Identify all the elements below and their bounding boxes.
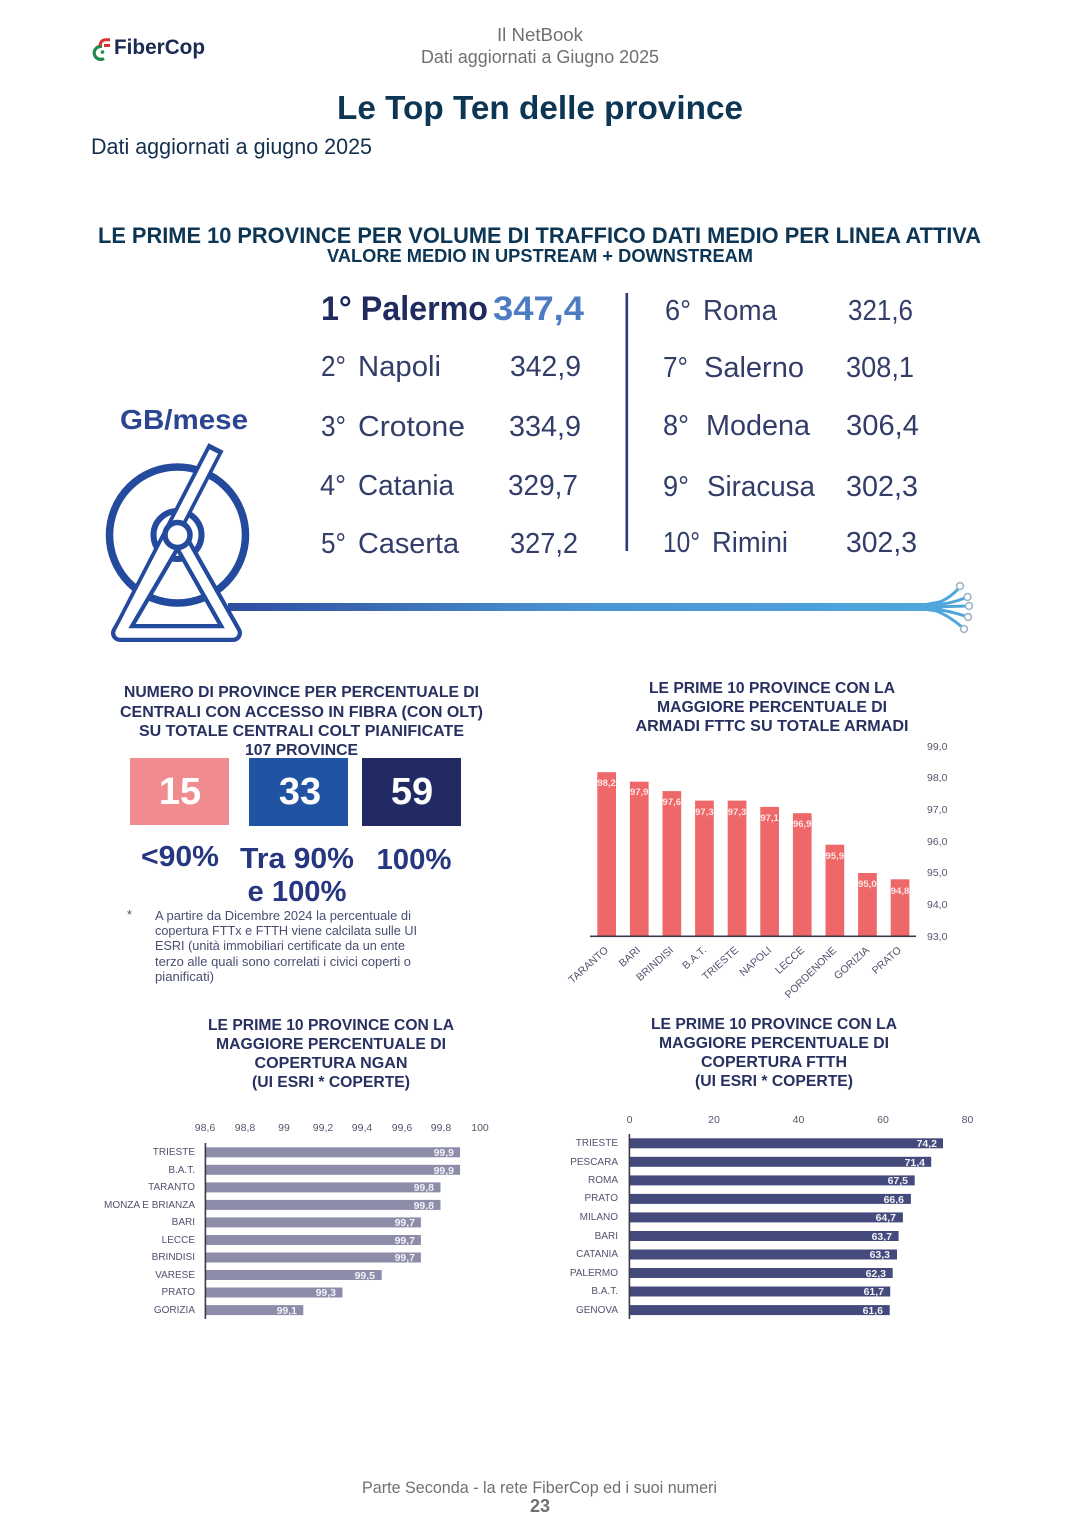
panel: NGAN coverage chart (104, 1017, 489, 1319)
footnote: terzo alle quali sono correlati i civici coperti o (155, 955, 411, 969)
tile 33: 33 (279, 771, 321, 813)
header text: Dati aggiornati a Giugno 2025 (421, 47, 659, 67)
x axis: 60 (877, 1114, 889, 1126)
footer: Parte Seconda - la rete FiberCop ed i suoi numeri (362, 1478, 717, 1497)
ranks 2 to 5: 3° (321, 411, 346, 443)
ranks 6 to 10: Modena (706, 410, 811, 442)
province labels: PESCARA (570, 1157, 618, 1168)
bar values: 97,3 (695, 807, 714, 818)
heading: COPERTURA FTTH (701, 1054, 847, 1071)
province labels: PALERMO (570, 1268, 618, 1279)
bar values (277, 1147, 454, 1317)
x axis: 98,6 (195, 1122, 215, 1134)
footnote (127, 908, 417, 984)
ranks 6 to 10: 321,6 (848, 295, 913, 327)
footnote: A partire da Dicembre 2024 la percentuale di (155, 909, 411, 923)
ranks 6 to 10: Rimini (712, 527, 788, 559)
province labels: LECCE (162, 1235, 195, 1246)
x axis: 99,6 (392, 1122, 412, 1134)
ranks 6 to 10: Roma (703, 295, 778, 327)
y axis: 99,0 (927, 741, 948, 753)
ranks 6 to 10: Salerno (704, 352, 804, 384)
bar values: 62,3 (866, 1268, 886, 1280)
tile labels: Tra 90% (240, 843, 354, 875)
x axis: 0 (627, 1114, 633, 1126)
icon: fibre cable line and fan-out (228, 583, 972, 632)
ranks 2 to 5: 2° (321, 351, 346, 383)
x labels: TARANTO (566, 944, 611, 986)
bar values (863, 1138, 937, 1317)
ranks 6 to 10: 7° (663, 352, 688, 384)
heading: LE PRIME 10 PROVINCE CON LA (208, 1017, 454, 1034)
panel: FTTH coverage chart (570, 1016, 973, 1319)
heading: SU TOTALE CENTRALI COLT PIANIFICATE (139, 723, 464, 740)
bar values: 99,9 (434, 1165, 454, 1177)
bar values: 95,9 (826, 851, 844, 862)
bar values: 63,7 (872, 1231, 892, 1243)
bars (597, 772, 909, 936)
subtitle: Dati aggiornati a giugno 2025 (91, 134, 372, 159)
ranks 6 to 10: 8° (663, 410, 689, 442)
ranks 2 to 5: Crotone (358, 411, 465, 443)
ranks 2 to 5: 4° (320, 470, 346, 502)
tile 33 (249, 758, 348, 826)
rank 1 Palermo: 1° Palermo (321, 290, 488, 328)
bar values: 63,3 (870, 1249, 890, 1261)
tile 15 (130, 758, 229, 825)
tile labels: e 100% (248, 876, 347, 908)
section heading: traffic (98, 223, 981, 266)
y axis: 93,0 (927, 931, 948, 943)
heading: MAGGIORE PERCENTUALE DI (659, 1035, 889, 1052)
x labels: GORIZIA (832, 944, 872, 982)
ranks 6 to 10: 302,3 (846, 527, 917, 559)
bar values: 98,2 (597, 778, 616, 789)
ranks 6 to 10: 308,1 (846, 352, 914, 384)
ranks 2 to 5: Catania (358, 470, 455, 502)
ranks 6 to 10: 10° (663, 527, 700, 559)
tile 15: 15 (159, 771, 201, 813)
bar values: 97,1 (760, 813, 780, 824)
bar values: 61,7 (864, 1286, 884, 1298)
x labels: NAPOLI (737, 944, 774, 979)
heading: CENTRALI CON ACCESSO IN FIBRA (CON OLT) (120, 704, 483, 721)
heading: (UI ESRI * COPERTE) (252, 1074, 410, 1091)
heading: MAGGIORE PERCENTUALE DI (657, 699, 887, 716)
x axis (195, 1122, 489, 1134)
section heading: traffic: VALORE MEDIO IN UPSTREAM + DOWNSTREAM (327, 246, 753, 266)
x labels: LECCE (773, 944, 807, 977)
bar values: 99,3 (316, 1287, 336, 1299)
x axis: 99,4 (352, 1122, 372, 1134)
province labels: PRATO (161, 1287, 195, 1298)
bars (629, 1138, 943, 1315)
heading: COPERTURA NGAN (254, 1055, 408, 1072)
footer (362, 1478, 717, 1516)
x axis: 98,8 (235, 1122, 255, 1134)
x axis: 80 (962, 1114, 973, 1126)
bar values: 64,7 (876, 1212, 896, 1224)
header text (421, 25, 659, 67)
bar values: 97,6 (663, 797, 681, 808)
bar values: 74,2 (917, 1138, 937, 1150)
heading (120, 684, 483, 759)
heading: LE PRIME 10 PROVINCE CON LA (651, 1016, 897, 1033)
province labels: B.A.T. (168, 1165, 195, 1176)
province labels: MONZA E BRIANZA (104, 1200, 195, 1211)
heading: NUMERO DI PROVINCE PER PERCENTUALE DI (124, 684, 479, 701)
footer: 23 (530, 1496, 550, 1516)
ranks 6 to 10: 302,3 (846, 471, 918, 503)
tile 59: 59 (391, 771, 433, 813)
province labels: CATANIA (576, 1249, 618, 1260)
province labels: BRINDISI (152, 1252, 195, 1263)
heading: ARMADI FTTC SU TOTALE ARMADI (636, 718, 908, 735)
province labels: TRIESTE (576, 1138, 618, 1149)
unit label: GB/mese: GB/mese (120, 404, 248, 435)
y axis: 97,0 (927, 804, 948, 816)
bar values: 97,9 (630, 787, 648, 798)
ranks 2 to 5: Caserta (358, 528, 460, 560)
province labels: ROMA (588, 1175, 618, 1186)
bar values: 95,0 (858, 879, 877, 890)
bar values: 99,8 (414, 1200, 434, 1212)
x axis: 40 (793, 1114, 804, 1126)
province labels: B.A.T. (591, 1286, 618, 1297)
ranks 2 to 5: 5° (321, 528, 346, 560)
rank 1 Palermo (321, 290, 584, 328)
x axis: 99 (278, 1122, 290, 1134)
heading: (UI ESRI * COPERTE) (695, 1073, 853, 1090)
ranks 2 to 5: Napoli (358, 351, 441, 383)
section heading: traffic: LE PRIME 10 PROVINCE PER VOLUME DI TRAFFICO DATI MEDIO PER LINEA ATTIVA (98, 223, 981, 248)
bar values: 99,5 (355, 1270, 375, 1282)
province labels: VARESE (155, 1270, 195, 1281)
bar values: 99,8 (414, 1182, 434, 1194)
ranks 6 to 10: 9° (663, 471, 689, 503)
x labels: PORDENONE (783, 945, 839, 1001)
footnote: pianificati) (155, 970, 214, 984)
bar values: 67,5 (888, 1175, 908, 1187)
heading: LE PRIME 10 PROVINCE CON LA (649, 680, 895, 697)
province labels (570, 1138, 618, 1316)
bars (205, 1147, 460, 1315)
bar values: 71,4 (905, 1157, 925, 1169)
y axis: 96,0 (927, 836, 948, 848)
ranks 6 to 10: 6° (665, 295, 691, 327)
x labels: BARI (617, 944, 643, 970)
rank 1 Palermo: 347,4 (493, 290, 584, 328)
tile 59 (362, 758, 461, 826)
bar values: 99,1 (277, 1305, 297, 1317)
x axis: 100 (471, 1122, 489, 1134)
tile labels: <90% (141, 841, 219, 873)
province labels: BARI (172, 1217, 195, 1228)
x labels: TRIESTE (700, 944, 741, 983)
y axis: 98,0 (927, 772, 948, 784)
bar values: 61,6 (863, 1305, 883, 1317)
footnote: ESRI (unità immobiliari certificate da un ente (155, 939, 405, 953)
x axis: 99,2 (313, 1122, 333, 1134)
province labels: TARANTO (148, 1182, 195, 1193)
ranks 2 to 5: 342,9 (510, 351, 581, 383)
bar values: 97,3 (728, 807, 746, 818)
tile labels (141, 841, 452, 908)
province labels: PRATO (584, 1193, 618, 1204)
province labels: BARI (595, 1231, 618, 1242)
icon: cable reel (110, 447, 246, 633)
tile labels: 100% (376, 844, 452, 876)
bar values (597, 778, 909, 897)
y axis (927, 741, 948, 943)
heading (651, 1016, 897, 1090)
ranks 2 to 5: 329,7 (508, 470, 578, 502)
heading: 107 PROVINCE (245, 742, 358, 759)
bar values: 66,6 (884, 1194, 904, 1206)
heading (208, 1017, 454, 1091)
footnote: copertura FTTx e FTTH viene calcilata sulle UI (155, 924, 417, 938)
province labels: MILANO (580, 1212, 618, 1223)
province labels: GENOVA (576, 1305, 618, 1316)
divider (626, 293, 628, 551)
ranks 6 to 10 (663, 295, 919, 559)
bar values: 99,7 (395, 1235, 415, 1247)
heading (636, 680, 908, 735)
x axis (627, 1114, 973, 1126)
x axis: 20 (708, 1114, 720, 1126)
province labels: TRIESTE (153, 1147, 195, 1158)
province labels (104, 1147, 195, 1316)
logo: FiberCop: FiberCop (114, 36, 205, 59)
bar values: 99,9 (434, 1147, 454, 1159)
x labels: PRATO (870, 944, 904, 977)
y axis: 95,0 (927, 867, 948, 879)
province labels: GORIZIA (154, 1305, 195, 1316)
heading: MAGGIORE PERCENTUALE DI (216, 1036, 446, 1053)
bar values: 96,9 (793, 819, 811, 830)
panel: provinces by fibre percentage (120, 684, 483, 984)
ranks 2 to 5: 327,2 (510, 528, 578, 560)
header text: Il NetBook (497, 25, 584, 45)
bar values: 99,7 (395, 1217, 415, 1229)
x labels (566, 944, 904, 1001)
panel: traffic ranking (320, 290, 919, 560)
panel: FTTC cabinets chart (566, 680, 948, 1001)
title: Le Top Ten delle province (337, 89, 743, 126)
x labels: B.A.T. (680, 944, 709, 972)
bar values: 99,7 (395, 1252, 415, 1264)
ranks 6 to 10: Siracusa (707, 471, 816, 503)
ranks 2 to 5 (320, 351, 581, 560)
x labels: BRINDISI (634, 944, 676, 984)
x axis: 99,8 (431, 1122, 451, 1134)
bar values: 94,8 (891, 886, 909, 897)
ranks 2 to 5: 334,9 (509, 411, 581, 443)
ranks 6 to 10: 306,4 (846, 410, 919, 442)
y axis: 94,0 (927, 899, 948, 911)
footnote: * (127, 908, 132, 922)
